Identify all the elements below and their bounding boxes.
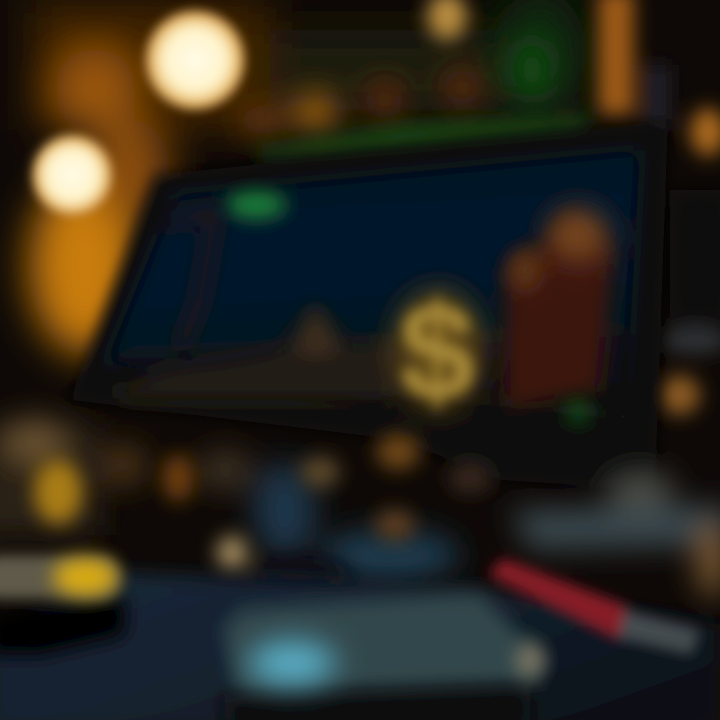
left item: gray and yellow stripe xyxy=(0,555,125,655)
light: upper bokeh bulb xyxy=(141,6,249,114)
foreground: tablet stand and blurred items xyxy=(0,418,460,581)
green rim above tablet xyxy=(255,116,590,160)
chart: green candle xyxy=(226,192,286,218)
red pen xyxy=(488,558,700,655)
background: bokeh spots and posts xyxy=(240,38,552,136)
light: left bokeh bulb xyxy=(28,131,116,219)
background: warm orange glow xyxy=(29,0,585,355)
right side: gray objects xyxy=(510,470,720,598)
chart: reddish line xyxy=(165,212,215,350)
tablet: dark frame and screen xyxy=(70,122,668,490)
cyan highlight xyxy=(248,641,336,685)
desk surface xyxy=(0,572,720,720)
chart: mountain line xyxy=(120,305,400,400)
laptop / device in the foreground xyxy=(222,592,545,720)
chart: brown bars xyxy=(505,210,615,410)
icon: dollar sign: $ xyxy=(399,276,475,427)
